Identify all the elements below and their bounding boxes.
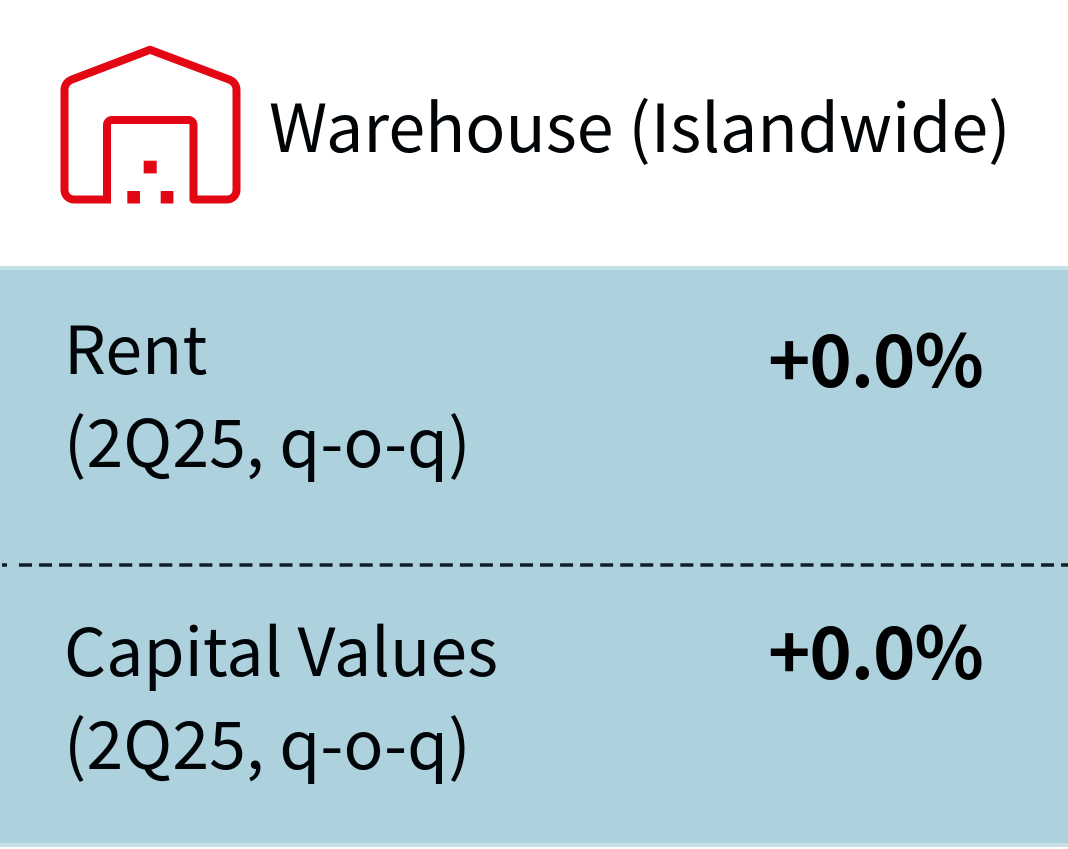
divider [2, 563, 1068, 567]
value: capital values change: +0.0% [768, 595, 983, 700]
label: rent: Rent [64, 298, 208, 394]
panel: metrics background [0, 266, 1068, 847]
label: rent period: (2Q25, q-o-q) [64, 391, 471, 487]
icon: warehouse [60, 46, 240, 204]
label: capital values period: (2Q25, q-o-q) [64, 693, 471, 789]
value: rent change: +0.0% [768, 303, 983, 408]
heading: Warehouse (Islandwide) [269, 76, 1011, 172]
label: capital values: Capital Values [64, 600, 498, 696]
